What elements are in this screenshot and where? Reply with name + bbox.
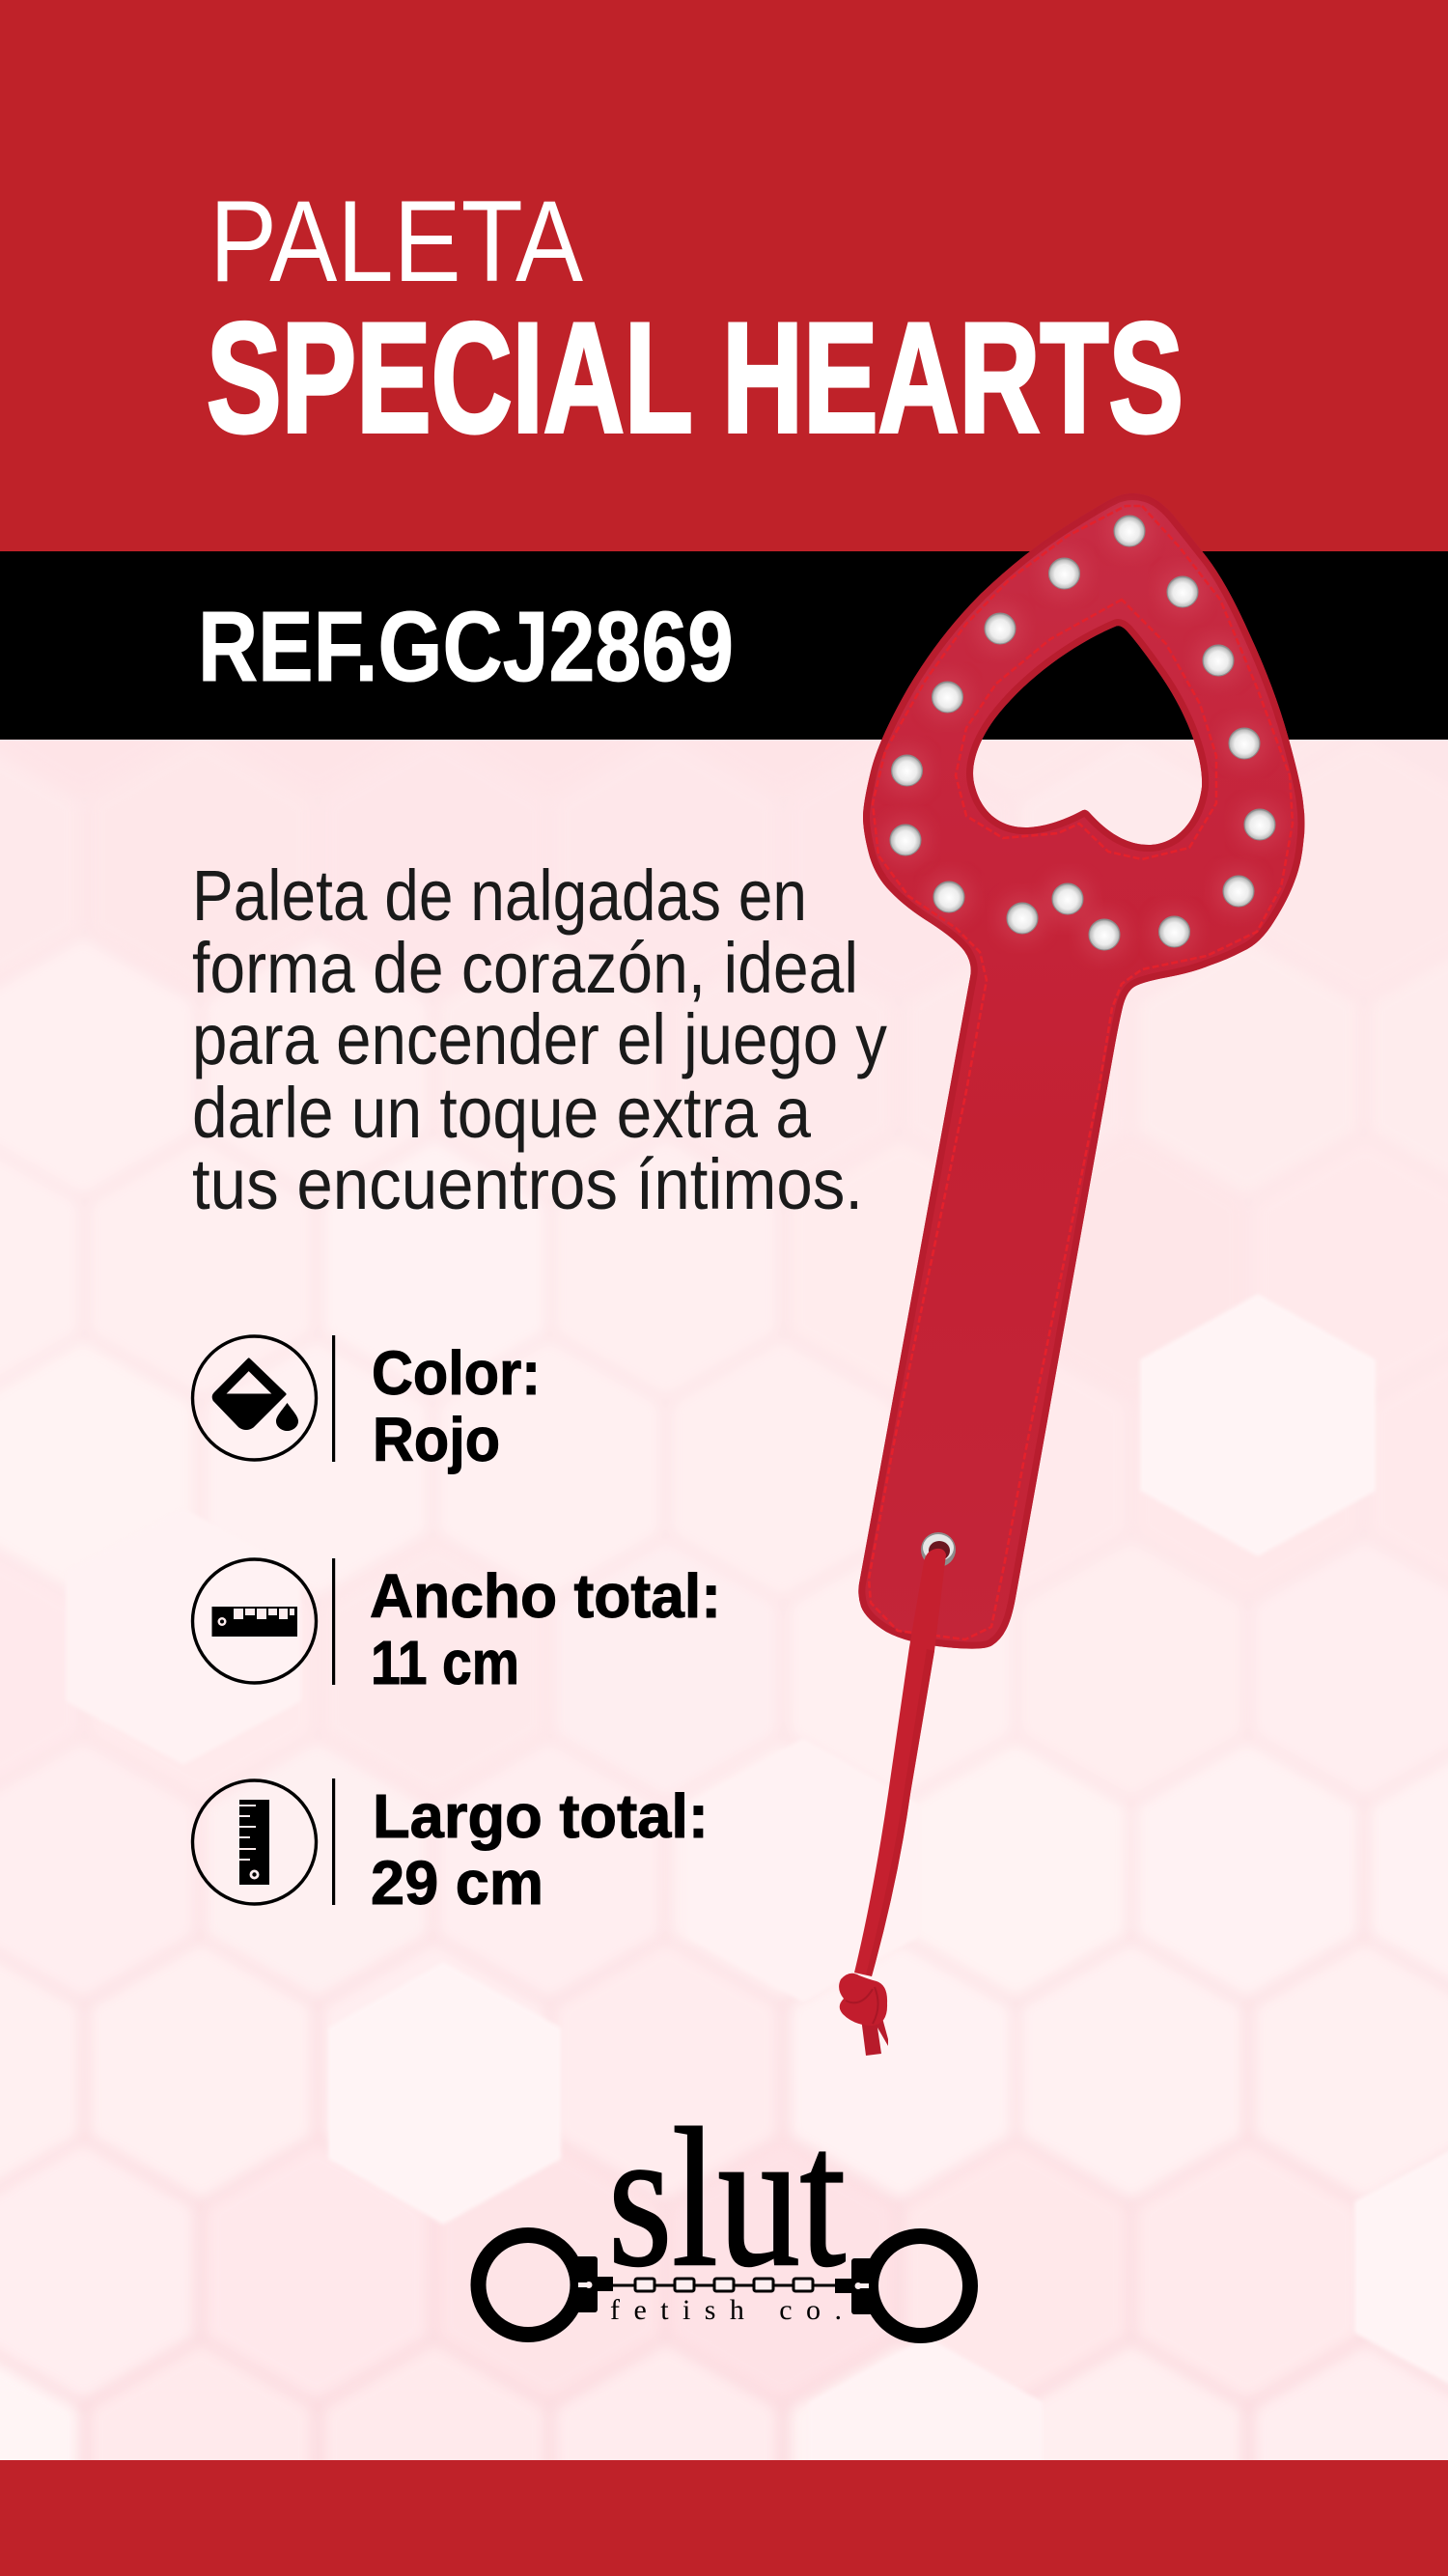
- top red banner: [0, 0, 1448, 551]
- spec: color: [193, 1335, 541, 1474]
- wordmark: slut: [608, 2088, 846, 2308]
- description text: para encender el juego y: [192, 999, 887, 1079]
- black reference band: [0, 551, 1448, 740]
- bottom red bar: [0, 2460, 1448, 2576]
- icon: paint bucket: [193, 1336, 317, 1460]
- description text: forma de corazón, ideal: [192, 928, 858, 1008]
- spec text: color: Rojo: [373, 1405, 500, 1474]
- metal studs: [890, 516, 1275, 950]
- reference code: REF.GCJ2869: [198, 591, 734, 702]
- background: pink hexagon pattern: [0, 1211, 1448, 2460]
- handcuffs: [479, 2235, 970, 2336]
- tagline: fetish co.: [610, 2294, 842, 2326]
- stitching: [869, 506, 1293, 1639]
- spec text: length: 29 cm: [371, 1848, 543, 1918]
- description text: tus encuentros íntimos.: [192, 1144, 863, 1224]
- spec text: color: Color:: [372, 1338, 541, 1408]
- title: [207, 177, 1183, 465]
- logo: slut fetish co.: [479, 2088, 970, 2336]
- strap and knot: [839, 1549, 946, 2056]
- spec: length: [193, 1778, 709, 1918]
- description text: [192, 855, 887, 1224]
- spec text: length: Largo total:: [373, 1781, 709, 1851]
- description text: Paleta de nalgadas en: [192, 855, 807, 936]
- spec text: color: [372, 1338, 541, 1474]
- spec text: width: Ancho total:: [370, 1561, 721, 1631]
- spec text: length: [371, 1781, 709, 1918]
- spec text: width: [370, 1561, 721, 1697]
- spec: width: [193, 1558, 721, 1697]
- icon: horizontal ruler: [193, 1559, 317, 1683]
- grommet: [921, 1532, 956, 1567]
- description text: darle un toque extra a: [192, 1073, 812, 1153]
- spec text: width: 11 cm: [371, 1628, 519, 1697]
- product: heart paddle: [839, 493, 1305, 2056]
- title: PALETA: [209, 177, 583, 306]
- icon: vertical ruler: [193, 1780, 317, 1904]
